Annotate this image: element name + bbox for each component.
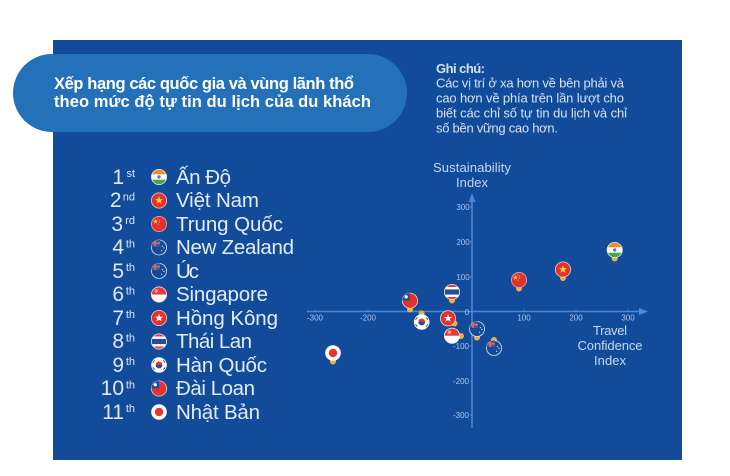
rank 9 Korea: Hàn Quốc xyxy=(176,354,267,377)
pin: New Zealand xyxy=(469,321,484,340)
rank 2 Vietnam xyxy=(110,189,259,212)
note text block: biết các chỉ số tự tin du lịch và chỉ xyxy=(436,106,627,120)
rank 7 Hong Kong: Hồng Kông xyxy=(176,307,278,330)
rank 1 India: 1 xyxy=(112,166,124,189)
pin: India xyxy=(607,242,623,262)
rank 1 India: Ấn Độ xyxy=(176,166,231,189)
rank 6 Singapore xyxy=(112,283,268,306)
pin: Australia xyxy=(486,337,502,356)
pin: Taiwan xyxy=(402,293,418,312)
pin: Hong Kong xyxy=(440,311,458,326)
tick labels: 0 xyxy=(465,308,470,317)
rank 10 Taiwan: th xyxy=(126,380,135,392)
pin: Thailand xyxy=(444,284,460,304)
rank 9 Korea: th xyxy=(126,356,135,368)
rank 8 Thailand: th xyxy=(126,332,135,344)
tick labels: -300 xyxy=(453,411,470,420)
rank 11 Japan: Nhật Bản xyxy=(176,401,260,424)
x axis title: Index xyxy=(594,353,626,368)
rank 4 New Zealand: th xyxy=(126,238,135,250)
pin: Singapore xyxy=(444,328,464,344)
rank 1 India: st xyxy=(126,168,135,180)
rank 5 Australia: th xyxy=(126,262,135,274)
rank 6 Singapore: 6 xyxy=(112,283,124,306)
rank 10 Taiwan: 10 xyxy=(101,377,124,400)
x axis title: Travel xyxy=(593,323,627,338)
rank 6 Singapore: Singapore xyxy=(176,283,268,306)
rank 3 China: rd xyxy=(125,215,135,227)
tick labels: 300 xyxy=(621,314,635,322)
rank 8 Thailand xyxy=(112,330,252,353)
rank 2 Vietnam: Việt Nam xyxy=(176,189,259,212)
rank 7 Hong Kong: th xyxy=(126,309,135,321)
title pill: theo mức độ tự tin du lịch của du khách xyxy=(54,93,371,111)
rank 11 Japan xyxy=(102,401,260,424)
tick labels: -300 xyxy=(307,314,324,322)
tick labels: -200 xyxy=(360,314,377,322)
tick labels: 100 xyxy=(456,273,470,282)
rank 2 Vietnam: nd xyxy=(123,192,135,204)
ranking list xyxy=(101,166,294,424)
rank 5 Australia: Úc xyxy=(176,260,199,283)
rank 4 New Zealand xyxy=(112,236,294,259)
scatter chart xyxy=(307,160,648,428)
y axis title xyxy=(433,160,512,190)
rank 2 Vietnam: 2 xyxy=(110,189,122,212)
rank 8 Thailand: Thái Lan xyxy=(176,330,252,353)
rank 7 Hong Kong: 7 xyxy=(112,307,124,330)
tick labels: -200 xyxy=(453,377,470,386)
tick labels: -100 xyxy=(453,342,470,351)
rank 10 Taiwan xyxy=(101,377,255,400)
rank 5 Australia: 5 xyxy=(112,260,124,283)
rank 11 Japan: th xyxy=(126,403,135,415)
pin: Japan xyxy=(325,345,341,364)
x axis title: Confidence xyxy=(578,338,642,353)
pin: Vietnam xyxy=(555,262,571,281)
rank 9 Korea xyxy=(112,354,267,377)
tick labels xyxy=(307,203,635,420)
note text block xyxy=(436,61,627,136)
rank 3 China: Trung Quốc xyxy=(176,213,283,236)
rank 1 India xyxy=(112,166,231,189)
rank 4 New Zealand: 4 xyxy=(112,236,124,259)
tick labels: 300 xyxy=(456,203,470,212)
tick labels: 200 xyxy=(569,314,583,322)
y axis title: Sustainability xyxy=(433,160,512,175)
rank 6 Singapore: th xyxy=(126,286,135,298)
note text block: Các vị trí ở xa hơn về bên phải và xyxy=(436,76,625,90)
title pill xyxy=(13,54,407,132)
title pill: Xếp hạng các quốc gia và vùng lãnh thổ xyxy=(54,75,354,93)
pin: China xyxy=(511,272,527,292)
rank 8 Thailand: 8 xyxy=(112,330,124,353)
note text block: cao hơn về phía trên lần lượt cho xyxy=(436,90,624,106)
axes xyxy=(307,193,648,428)
rank 3 China xyxy=(111,213,283,236)
rank 11 Japan: 11 xyxy=(102,401,124,424)
tick labels: 100 xyxy=(517,314,531,322)
background panel xyxy=(53,40,682,460)
rank 4 New Zealand: New Zealand xyxy=(176,236,294,259)
pin: Korea xyxy=(414,310,430,330)
rank 10 Taiwan: Đài Loan xyxy=(176,377,255,400)
rank 3 China: 3 xyxy=(111,213,123,236)
note text block: Ghi chú: xyxy=(436,61,485,76)
x axis title xyxy=(578,323,642,368)
y axis title: Index xyxy=(456,175,488,190)
rank 7 Hong Kong xyxy=(112,307,278,330)
rank 5 Australia xyxy=(112,260,199,283)
tick labels: 200 xyxy=(456,238,470,247)
rank 9 Korea: 9 xyxy=(112,354,124,377)
note text block: số bền vững cao hơn. xyxy=(436,120,558,136)
